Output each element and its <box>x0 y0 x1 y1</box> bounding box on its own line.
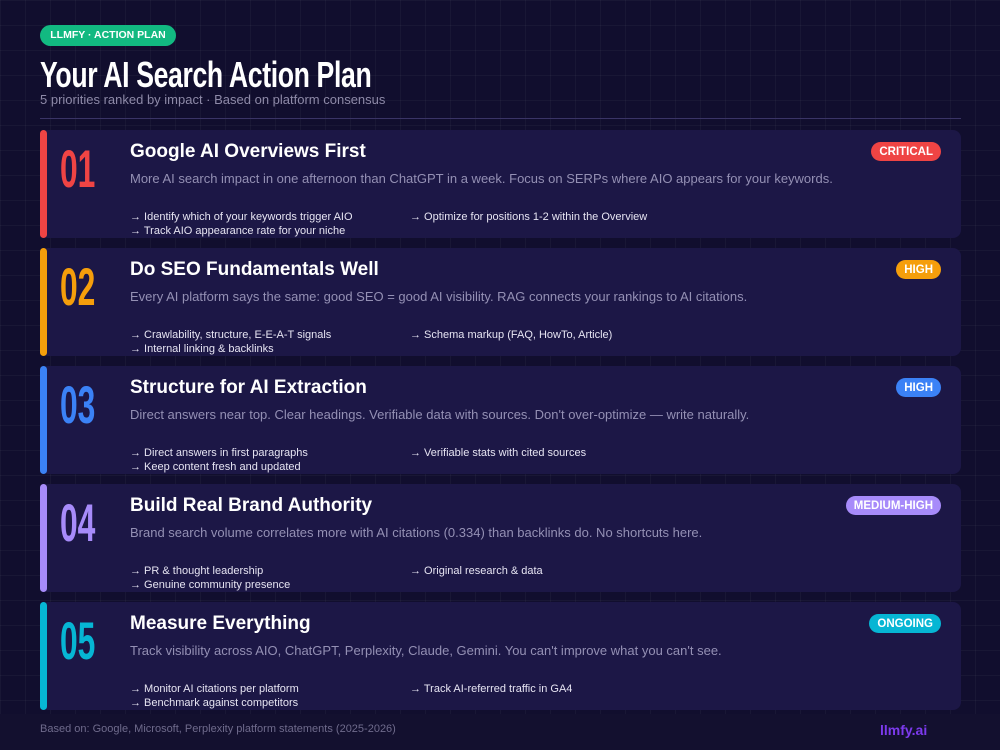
badge <box>896 260 941 279</box>
bullets: → Keep content fresh and updated <box>130 461 301 473</box>
bullets <box>130 447 308 473</box>
badge <box>846 496 941 515</box>
bullets: → Track AIO appearance rate for your niche <box>130 225 345 237</box>
title: Your AI Search Action Plan <box>40 54 371 95</box>
description: Brand search volume correlates more with AI citations (0.334) than backlinks do. No shortcuts here. <box>130 525 702 540</box>
badge: MEDIUM-HIGH <box>854 500 933 512</box>
bullets: → Genuine community presence <box>130 579 290 591</box>
panel: card 03 <box>40 366 961 474</box>
subtitle: 5 priorities ranked by impact · Based on platform consensus <box>40 92 385 107</box>
description: Every AI platform says the same: good SEO = good AI visibility. RAG connects your rankings to AI citations. <box>130 289 747 304</box>
panel: card 01 <box>40 130 961 238</box>
footer brand: llmfy.ai <box>880 722 927 738</box>
bullet col 2: → Track AI-referred traffic in GA4 <box>410 683 572 695</box>
bullets: → Benchmark against competitors <box>130 697 298 709</box>
tag pill: LLMFY · ACTION PLAN <box>50 29 166 41</box>
bullet col 2: → Optimize for positions 1-2 within the Overview <box>410 211 647 223</box>
badge: ONGOING <box>877 618 933 630</box>
description: More AI search impact in one afternoon than ChatGPT in a week. Focus on SERPs where AIO appears for your keywords. <box>130 171 833 186</box>
card title: Structure for AI Extraction <box>130 377 367 398</box>
bullets: → PR & thought leadership <box>130 565 263 577</box>
number 02: 02 <box>60 258 95 317</box>
badge <box>896 378 941 397</box>
footer <box>0 714 1000 750</box>
bullets: → Identify which of your keywords trigger AIO <box>130 211 353 223</box>
bullet col 2: → Original research & data <box>410 565 543 577</box>
panel: card 05 <box>40 602 961 710</box>
bullets: → Internal linking & backlinks <box>130 343 274 355</box>
card title: Measure Everything <box>130 613 311 634</box>
bullets: → Direct answers in first paragraphs <box>130 447 308 459</box>
number 04: 04 <box>60 494 95 553</box>
badge <box>869 614 941 633</box>
card title: Do SEO Fundamentals Well <box>130 259 379 280</box>
panel: card 02 <box>40 248 961 356</box>
footer source text: Based on: Google, Microsoft, Perplexity platform statements (2025-2026) <box>40 723 396 735</box>
number 03: 03 <box>60 376 95 435</box>
badge: HIGH <box>904 264 933 276</box>
bullets: → Crawlability, structure, E-E-A-T signals <box>130 329 331 341</box>
description: Direct answers near top. Clear headings. Verifiable data with sources. Don't over-optimize — write naturally. <box>130 407 749 422</box>
badge: HIGH <box>904 382 933 394</box>
bullets <box>130 329 331 355</box>
number 01: 01 <box>60 140 95 199</box>
bullet col 2: → Verifiable stats with cited sources <box>410 447 586 459</box>
bullets <box>130 683 299 709</box>
badge: CRITICAL <box>879 146 933 158</box>
bullets <box>130 565 290 591</box>
bullets <box>130 211 353 237</box>
description: Track visibility across AIO, ChatGPT, Perplexity, Claude, Gemini. You can't improve what you can't see. <box>130 643 722 658</box>
tag pill <box>40 25 176 46</box>
bullet col 2: → Schema markup (FAQ, HowTo, Article) <box>410 329 612 341</box>
bullets: → Monitor AI citations per platform <box>130 683 299 695</box>
card title: Google AI Overviews First <box>130 141 366 162</box>
panel: card 04 <box>40 484 961 592</box>
badge <box>871 142 941 161</box>
card title: Build Real Brand Authority <box>130 495 372 516</box>
number 05: 05 <box>60 612 95 671</box>
